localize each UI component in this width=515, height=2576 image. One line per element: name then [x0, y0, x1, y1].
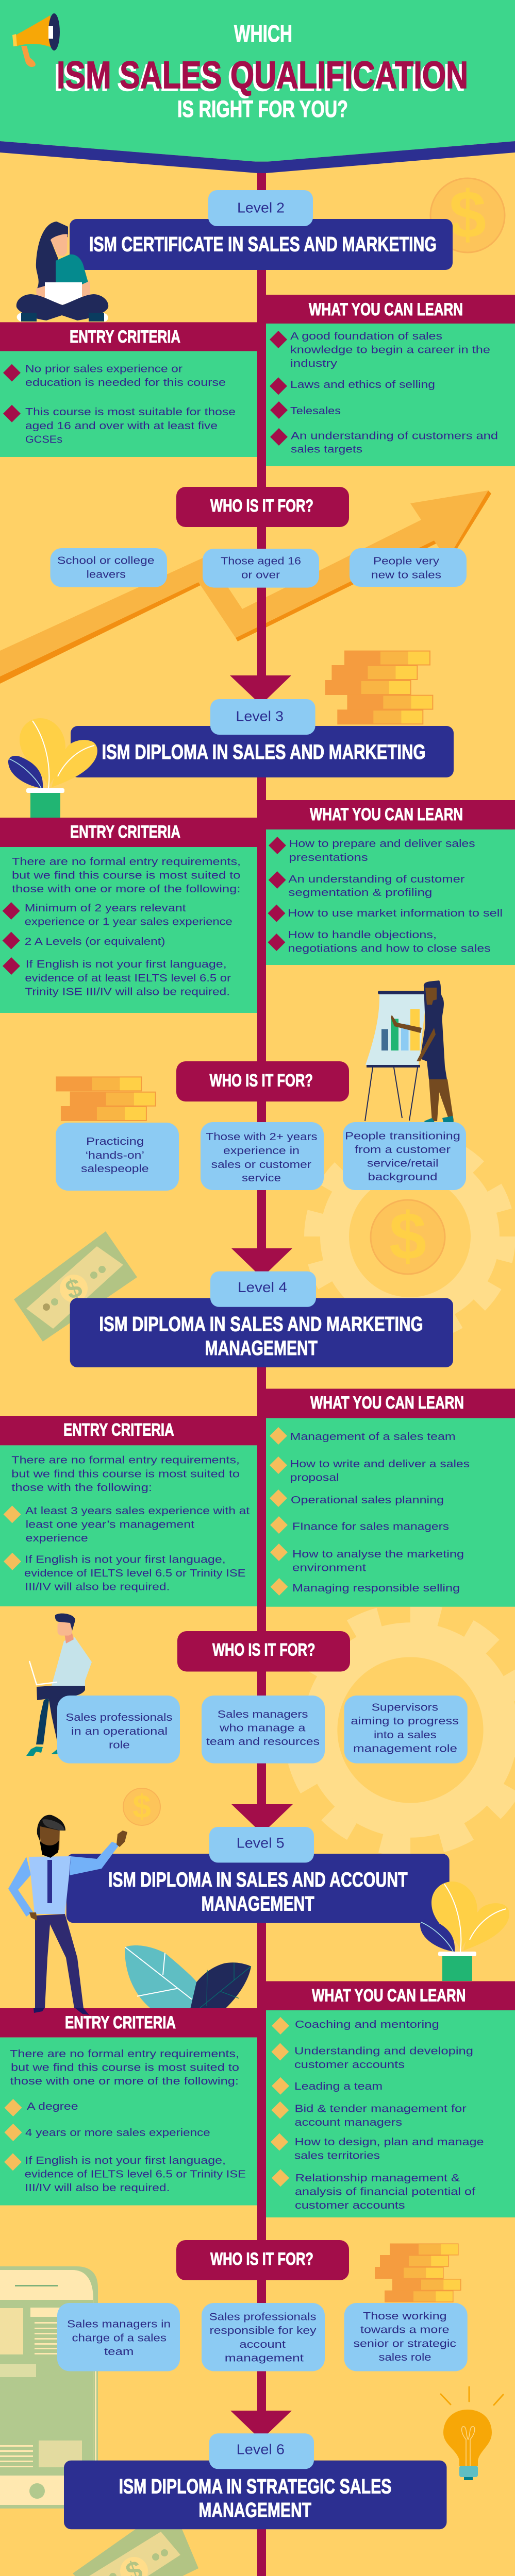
learning list: environment	[292, 1563, 367, 1574]
criteria list: education is needed for this course	[25, 377, 226, 388]
audience: those working towards senior: sales role	[379, 2352, 431, 2363]
criteria list	[0, 1445, 257, 1606]
learning list	[266, 324, 515, 466]
illustration: coin stack	[325, 651, 433, 724]
audience: practicing hands-on salespeople	[56, 1123, 179, 1191]
panel: entry criteria	[0, 1416, 257, 1606]
learning list: Bid & tender management for	[295, 2104, 467, 2115]
learning list: Relationship management &	[295, 2173, 460, 2184]
audience: sales managers: who manage a	[219, 1723, 306, 1734]
illustration: leaves	[125, 1945, 251, 2014]
audience: those working towards senior	[344, 2303, 468, 2371]
audience: people transitioning: from a customer	[355, 1144, 451, 1156]
who is it for heading	[176, 1061, 349, 1101]
audience: sales professionals key account: account	[239, 2339, 286, 2350]
illustration: plant	[420, 1882, 509, 1981]
who is it for heading	[177, 1631, 350, 1671]
arrow to level 3	[230, 675, 291, 705]
criteria list: aged 16 and over with at least five	[25, 420, 218, 432]
panel: what you can learn	[257, 295, 515, 466]
background illustration: money bill, level 3: $	[62, 1273, 86, 1306]
icon: megaphone	[12, 13, 60, 67]
heading: entry criteria	[0, 322, 257, 351]
learning list: Telesales	[290, 405, 341, 417]
panel: entry criteria	[0, 818, 257, 1013]
audience: supervisors: Supervisors	[372, 1702, 438, 1714]
section: level 5	[0, 1804, 515, 2371]
heading: entry criteria: ENTRY CRITERIA	[63, 1420, 174, 1439]
section: level 3	[0, 651, 515, 1191]
criteria list: 2 A Levels (or equivalent)	[25, 936, 165, 947]
background illustration: phone, level 5	[0, 2266, 98, 2509]
learning list: A good foundation of sales	[290, 331, 442, 342]
audience: people very new to sales: People very	[373, 555, 439, 567]
background illustration: gear, level 4	[294, 1614, 515, 1846]
background illustration: money bill, level 3	[14, 1231, 137, 1342]
criteria list: those with one or more of the following:	[10, 2076, 239, 2087]
audience: practicing hands-on salespeople: Practicing	[86, 1136, 144, 1147]
course title bar	[70, 1298, 453, 1367]
audience: people transitioning: background	[368, 1172, 437, 1183]
criteria list	[0, 847, 257, 1013]
audience: those with 2+ years experience: Those with 2+ years	[206, 1131, 318, 1143]
audience: those with 2+ years experience: sales or customer	[211, 1159, 311, 1171]
heading: what you can learn: WHAT YOU CAN LEARN	[309, 300, 463, 319]
level badge: Level 3	[236, 708, 284, 724]
criteria list: There are no formal entry requirements,	[10, 2048, 239, 2060]
background illustration: gear and coin, level 3: $	[389, 1198, 426, 1274]
heading: entry criteria	[0, 818, 257, 847]
criteria list: Trinity ISE III/IV will also be required.	[25, 986, 230, 997]
learning list: An understanding of customer	[288, 874, 465, 885]
audience: sales professionals key account: Sales professionals	[209, 2312, 317, 2323]
title line: which: WHICH	[234, 20, 292, 47]
audience: supervisors: into a sales	[374, 1730, 437, 1741]
audience: sales professionals key account	[202, 2303, 325, 2371]
audience: those with 2+ years experience	[201, 1122, 324, 1190]
audience: practicing hands-on salespeople: salespeople	[81, 1163, 149, 1175]
course title bar: MANAGEMENT	[205, 1337, 318, 1360]
learning list: customer accounts	[295, 2200, 405, 2211]
heading: entry criteria: ENTRY CRITERIA	[65, 2013, 176, 2032]
who is it for heading: WHO IS IT FOR?	[210, 2249, 313, 2269]
panel: what you can learn	[257, 1981, 515, 2217]
level badge	[210, 1272, 316, 1307]
criteria list: If English is not your first language,	[26, 959, 227, 970]
heading: what you can learn	[257, 1981, 515, 2010]
course title bar	[71, 726, 454, 777]
audience: sales managers	[202, 1696, 325, 1764]
learning list: segmentation & profiling	[288, 887, 432, 899]
level badge	[208, 190, 313, 226]
course title bar: MANAGEMENT	[198, 2499, 311, 2521]
who is it for heading: WHO IS IT FOR?	[209, 1071, 313, 1090]
audience: people transitioning	[343, 1122, 466, 1190]
level badge: Level 6	[237, 2442, 285, 2458]
heading: what you can learn	[257, 1389, 515, 1418]
criteria list: A degree	[27, 2101, 78, 2112]
criteria list: No prior sales experience or	[25, 364, 182, 375]
audience: sales professionals in an operational role: role	[109, 1740, 130, 1751]
criteria list: those with the following:	[11, 1482, 152, 1494]
background illustration: dollar coin, level 2: $	[449, 177, 486, 252]
who is it for heading	[176, 487, 349, 527]
audience: sales professionals in an operational role: Sales professionals	[65, 1712, 172, 1723]
learning list: Laws and ethics of selling	[290, 379, 435, 391]
criteria list: least one year’s management	[26, 1519, 195, 1531]
learning list: proposal	[290, 1472, 339, 1484]
learning list: How to prepare and deliver sales	[289, 838, 475, 850]
criteria list: evidence of IELTS level 6.5 or Trinity ISE	[24, 1568, 245, 1579]
background illustration: rising arrow, level 2	[0, 490, 491, 684]
panel: entry criteria	[0, 2008, 257, 2205]
illustration: woman with laptop	[16, 222, 108, 321]
learning list: sales territories	[294, 2150, 380, 2162]
audience: school or college leavers: leavers	[87, 569, 126, 580]
criteria list: III/IV will also be required.	[25, 1581, 170, 1592]
learning list: customer accounts	[294, 2059, 405, 2071]
learning list: industry	[290, 358, 337, 369]
criteria list: III/IV will also be required.	[25, 2182, 170, 2194]
who is it for heading	[176, 2240, 349, 2280]
learning list: Management of a sales team	[290, 1431, 456, 1443]
audience: sales managers in charge: Sales managers in	[67, 2319, 171, 2330]
audience: sales managers: team and resources	[206, 1736, 320, 1748]
learning list	[266, 829, 515, 965]
section: level 4	[0, 1248, 515, 1764]
audience: those aged 16 or over	[203, 549, 319, 588]
course title bar: ISM DIPLOMA IN STRATEGIC SALES	[119, 2475, 391, 2498]
background illustration: money bill, level 6	[73, 2519, 198, 2576]
illustration: standing man	[8, 1815, 127, 2008]
illustration: coin stack	[375, 2243, 461, 2302]
course title bar: ISM DIPLOMA IN SALES AND MARKETING	[99, 1313, 423, 1336]
heading: entry criteria: ENTRY CRITERIA	[70, 327, 180, 347]
header green chevron	[0, 0, 515, 162]
audience: sales professionals in an operational role: in an operational	[71, 1726, 168, 1737]
audience: school or college leavers	[51, 548, 167, 587]
criteria list: but we find this course is most suited to	[11, 1468, 240, 1480]
audience: people very new to sales: new to sales	[371, 569, 441, 581]
audience: supervisors	[344, 1696, 468, 1764]
illustration: seated man with laptop	[26, 1614, 92, 1756]
heading: what you can learn	[257, 295, 515, 324]
audience: those aged 16 or over: Those aged 16	[221, 555, 301, 567]
heading: entry criteria	[0, 2008, 257, 2038]
background illustration: dollar coin, level 2	[430, 177, 505, 252]
audience: people transitioning: service/retail	[367, 1158, 438, 1170]
level badge	[210, 699, 315, 735]
learning list	[266, 2010, 515, 2217]
criteria list: 4 years or more sales experience	[25, 2127, 210, 2139]
learning list: analysis of financial potential of	[295, 2187, 476, 2198]
learning list: Understanding and developing	[294, 2046, 473, 2057]
audience: school or college leavers: School or college	[57, 555, 155, 567]
who is it for heading: WHO IS IT FOR?	[212, 1640, 315, 1660]
criteria list	[0, 351, 257, 457]
heading: what you can learn	[257, 800, 515, 829]
learning list: How to analyse the marketing	[292, 1549, 464, 1560]
learning list: Managing responsible selling	[292, 1583, 460, 1594]
learning list: Coaching and mentoring	[295, 2019, 439, 2030]
learning list: FInance for sales managers	[292, 1521, 449, 1533]
learning list: negotiations and how to close sales	[288, 943, 491, 955]
heading: what you can learn: WHAT YOU CAN LEARN	[310, 1393, 464, 1413]
learning list: sales targets	[291, 444, 362, 455]
level badge: Level 4	[238, 1279, 287, 1295]
learning list: Operational sales planning	[291, 1495, 444, 1506]
heading: entry criteria	[0, 1416, 257, 1445]
criteria list: evidence of IELTS level 6.5 or Trinity ISE	[25, 2168, 246, 2180]
criteria list: This course is most suitable for those	[25, 406, 236, 418]
course title bar	[67, 1854, 450, 1923]
header	[0, 0, 515, 173]
course title bar: MANAGEMENT	[201, 1892, 314, 1915]
learning list: An understanding of customers and	[291, 431, 498, 442]
heading: what you can learn: WHAT YOU CAN LEARN	[310, 805, 463, 824]
criteria list: GCSEs	[25, 434, 62, 446]
audience: people very new to sales	[350, 548, 467, 587]
panel: what you can learn	[257, 800, 515, 965]
panel: what you can learn	[257, 1389, 515, 1607]
criteria list: evidence of at least IELTS level 6.5 or	[25, 973, 231, 984]
title line: is right for you: IS RIGHT FOR YOU?	[177, 96, 348, 122]
header navy band	[0, 141, 515, 173]
audience: sales managers in charge: team	[104, 2346, 134, 2358]
learning list: presentations	[289, 852, 368, 863]
criteria list: experience	[26, 1533, 88, 1544]
criteria list	[0, 2038, 257, 2205]
section: level 2	[0, 190, 515, 588]
heading: what you can learn: WHAT YOU CAN LEARN	[312, 1986, 466, 2005]
audience: supervisors: aiming to progress	[351, 1716, 459, 1727]
course title bar: ISM DIPLOMA IN SALES AND ACCOUNT	[108, 1869, 408, 1891]
criteria list: If English is not your first language,	[25, 1554, 226, 1565]
course title bar	[70, 219, 453, 270]
background illustration: dollar coin, level 4: $	[132, 1788, 151, 1825]
arrow to level 6	[230, 2411, 292, 2440]
background illustration: dollar coin, level 4	[123, 1788, 160, 1825]
level badge: Level 5	[237, 1835, 285, 1851]
audience: those with 2+ years experience: service	[242, 1173, 281, 1184]
section: level 6	[0, 2387, 515, 2576]
level badge	[209, 1827, 314, 1862]
learning list: How to design, plan and manage	[295, 2137, 484, 2148]
level badge: Level 2	[237, 200, 285, 215]
background illustration: gear and coin, level 3	[313, 1140, 507, 1333]
criteria list: those with one or more of the following:	[12, 884, 240, 895]
criteria list: but we find this course is most suited to	[11, 2062, 239, 2073]
audience: sales professionals key account: management	[225, 2352, 304, 2364]
level badge	[209, 2433, 314, 2469]
main timeline stem	[257, 170, 266, 2576]
criteria list: At least 3 years sales experience with at	[25, 1505, 250, 1517]
learning list: account managers	[295, 2117, 402, 2128]
audience: those working towards senior: Those working	[363, 2311, 446, 2322]
audience: practicing hands-on salespeople: ‘hands-on’	[86, 1150, 144, 1161]
audience: sales professionals in an operational role	[57, 1696, 180, 1764]
who is it for heading: WHO IS IT FOR?	[210, 496, 313, 516]
course title bar: ISM DIPLOMA IN SALES AND MARKETING	[102, 741, 426, 764]
learning list: How to use market information to sell	[288, 908, 503, 919]
audience: sales managers in charge	[57, 2303, 180, 2371]
course title bar	[64, 2461, 446, 2529]
criteria list: Minimum of 2 years relevant	[25, 903, 186, 914]
audience: sales managers: Sales managers	[218, 1709, 308, 1720]
learning list	[266, 1418, 515, 1607]
learning list: knowledge to begin a career in the	[290, 345, 490, 356]
illustration: coin stack	[56, 1076, 156, 1121]
criteria list: There are no formal entry requirements,	[11, 1455, 240, 1466]
arrow to level 5	[231, 1804, 293, 1834]
audience: sales professionals key account: responsible for key	[209, 2325, 317, 2336]
audience: those with 2+ years experience: experience in	[223, 1145, 300, 1157]
criteria list: There are no formal entry requirements,	[12, 856, 241, 868]
audience: those working towards senior: towards a more	[360, 2325, 450, 2336]
illustration: presenter with flipchart	[365, 980, 454, 1122]
heading: entry criteria: ENTRY CRITERIA	[70, 822, 180, 842]
learning list: Leading a team	[294, 2081, 383, 2092]
learning list: How to write and deliver a sales	[290, 1459, 470, 1470]
learning list: How to handle objections,	[288, 929, 437, 941]
audience: those working towards senior: senior or strategic	[354, 2338, 456, 2350]
audience: those aged 16 or over: or over	[241, 569, 280, 581]
audience: supervisors: management role	[353, 1743, 457, 1755]
criteria list: but we find this course is most suited to	[12, 870, 240, 881]
illustration: plant	[8, 718, 97, 818]
arrow to level 4	[231, 1248, 292, 1278]
panel: entry criteria	[0, 322, 257, 457]
audience: people transitioning: People transitioning	[345, 1131, 460, 1142]
criteria list: experience or 1 year sales experience	[25, 917, 232, 928]
criteria list: If English is not your first language,	[25, 2155, 226, 2166]
icon: light bulb	[441, 2387, 503, 2480]
audience: sales managers in charge: charge of a sales	[72, 2333, 167, 2344]
